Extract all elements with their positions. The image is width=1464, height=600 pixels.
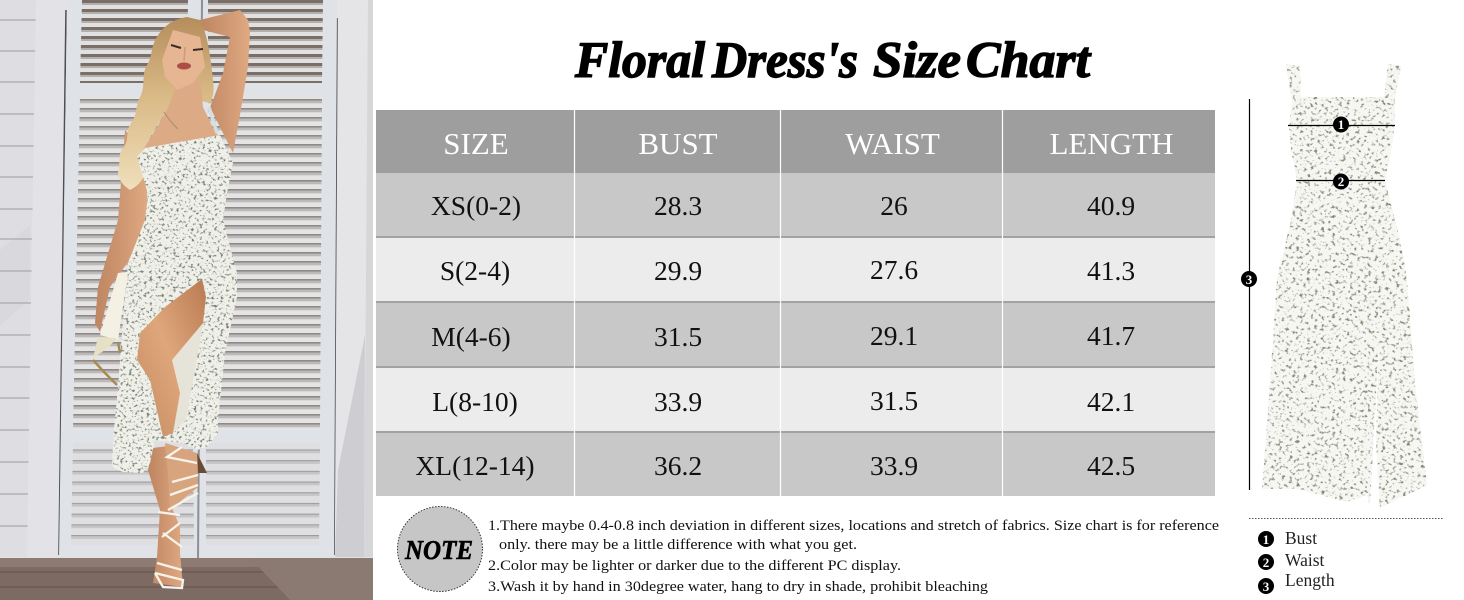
table header row: LENGTH bbox=[1050, 126, 1173, 161]
legend: waist: Waist bbox=[1285, 550, 1325, 570]
waist measure bbox=[1296, 174, 1385, 190]
note badge: NOTE bbox=[404, 535, 473, 565]
standing leg and sandal bbox=[148, 446, 183, 588]
note badge bbox=[398, 506, 482, 592]
neck and chest bbox=[143, 78, 220, 150]
row XS: XS(0-2) bbox=[431, 190, 521, 221]
row XL: XL(12-14) bbox=[415, 450, 535, 481]
length measure bbox=[1241, 99, 1257, 490]
care and measurement notes: 3.Wash it by hand in 30degree water, hang to dry in shade, prohibit bleaching bbox=[488, 579, 989, 595]
face bbox=[162, 30, 205, 90]
care and measurement notes: only. there may be a little difference with what you get. bbox=[499, 537, 857, 553]
row M: 41.7 bbox=[1087, 320, 1135, 351]
row XL: 33.9 bbox=[870, 450, 918, 481]
legend: waist bbox=[1258, 550, 1325, 570]
clutch bag bbox=[93, 272, 128, 385]
row XS: 26 bbox=[880, 190, 908, 221]
size table bbox=[376, 110, 1215, 496]
table header row: BUST bbox=[638, 126, 718, 161]
title bbox=[574, 33, 1092, 89]
row XS bbox=[376, 173, 1215, 236]
hair bbox=[118, 17, 214, 190]
row S bbox=[376, 238, 1215, 301]
flat dress garment bbox=[1262, 64, 1427, 508]
row XL: 42.5 bbox=[1087, 450, 1135, 481]
row L: 42.1 bbox=[1087, 386, 1135, 417]
row M bbox=[376, 303, 1215, 366]
wall siding left bbox=[0, 0, 36, 557]
row M: M(4-6) bbox=[431, 321, 511, 352]
length measure: 3 bbox=[1246, 272, 1253, 287]
row L bbox=[376, 368, 1215, 431]
legend: waist: 2 bbox=[1263, 555, 1269, 570]
legend: length: Length bbox=[1285, 570, 1335, 590]
title: Size bbox=[873, 33, 961, 89]
legend: bust: Bust bbox=[1285, 528, 1317, 548]
row XS: 40.9 bbox=[1087, 190, 1135, 221]
care and measurement notes: 1.There maybe 0.4-0.8 inch deviation in different sizes, locations and stretch of fabrics. Size chart is for reference bbox=[488, 518, 1219, 534]
measurement legend bbox=[1258, 528, 1335, 594]
raised arm bbox=[200, 10, 250, 153]
photo: model in floral dress in front of shutters bbox=[0, 0, 373, 600]
row S: 41.3 bbox=[1087, 255, 1135, 286]
row L: 31.5 bbox=[870, 385, 918, 416]
row S: S(2-4) bbox=[440, 255, 510, 286]
row XL bbox=[376, 433, 1215, 496]
lowered arm bbox=[95, 130, 148, 332]
necklace bbox=[164, 112, 178, 129]
table header row: WAIST bbox=[845, 126, 940, 161]
legend: length: 3 bbox=[1263, 579, 1270, 594]
waist measure: 2 bbox=[1338, 174, 1344, 189]
wooden floor bbox=[0, 558, 373, 600]
row L: 33.9 bbox=[654, 386, 702, 417]
row S: 27.6 bbox=[870, 254, 918, 285]
title: Dress's bbox=[711, 33, 858, 89]
bust measure bbox=[1288, 116, 1395, 132]
row M: 29.1 bbox=[870, 320, 918, 351]
bust measure: 1 bbox=[1338, 117, 1344, 132]
row XL: 36.2 bbox=[654, 450, 702, 481]
row M: 31.5 bbox=[654, 321, 702, 352]
title: Chart bbox=[966, 33, 1092, 89]
row L: L(8-10) bbox=[432, 386, 518, 417]
legend: bust: 1 bbox=[1263, 532, 1269, 547]
flat dress diagram bbox=[1241, 64, 1427, 508]
table header row bbox=[376, 110, 1215, 173]
row XS: 28.3 bbox=[654, 190, 702, 221]
title: Floral bbox=[574, 33, 706, 89]
floral dress on model bbox=[112, 135, 237, 473]
door frame bbox=[27, 0, 373, 557]
care and measurement notes: 2.Color may be lighter or darker due to the different PC display. bbox=[488, 558, 901, 574]
raised thigh and shin bbox=[137, 279, 207, 510]
row S: 29.9 bbox=[654, 255, 702, 286]
legend: length bbox=[1258, 570, 1335, 594]
dress slit lining bbox=[172, 323, 203, 433]
shutter doors bbox=[59, 0, 337, 558]
legend: bust bbox=[1258, 528, 1317, 548]
dress strap bbox=[209, 107, 217, 133]
table header row: SIZE bbox=[443, 126, 509, 161]
care and measurement notes bbox=[488, 518, 1219, 595]
